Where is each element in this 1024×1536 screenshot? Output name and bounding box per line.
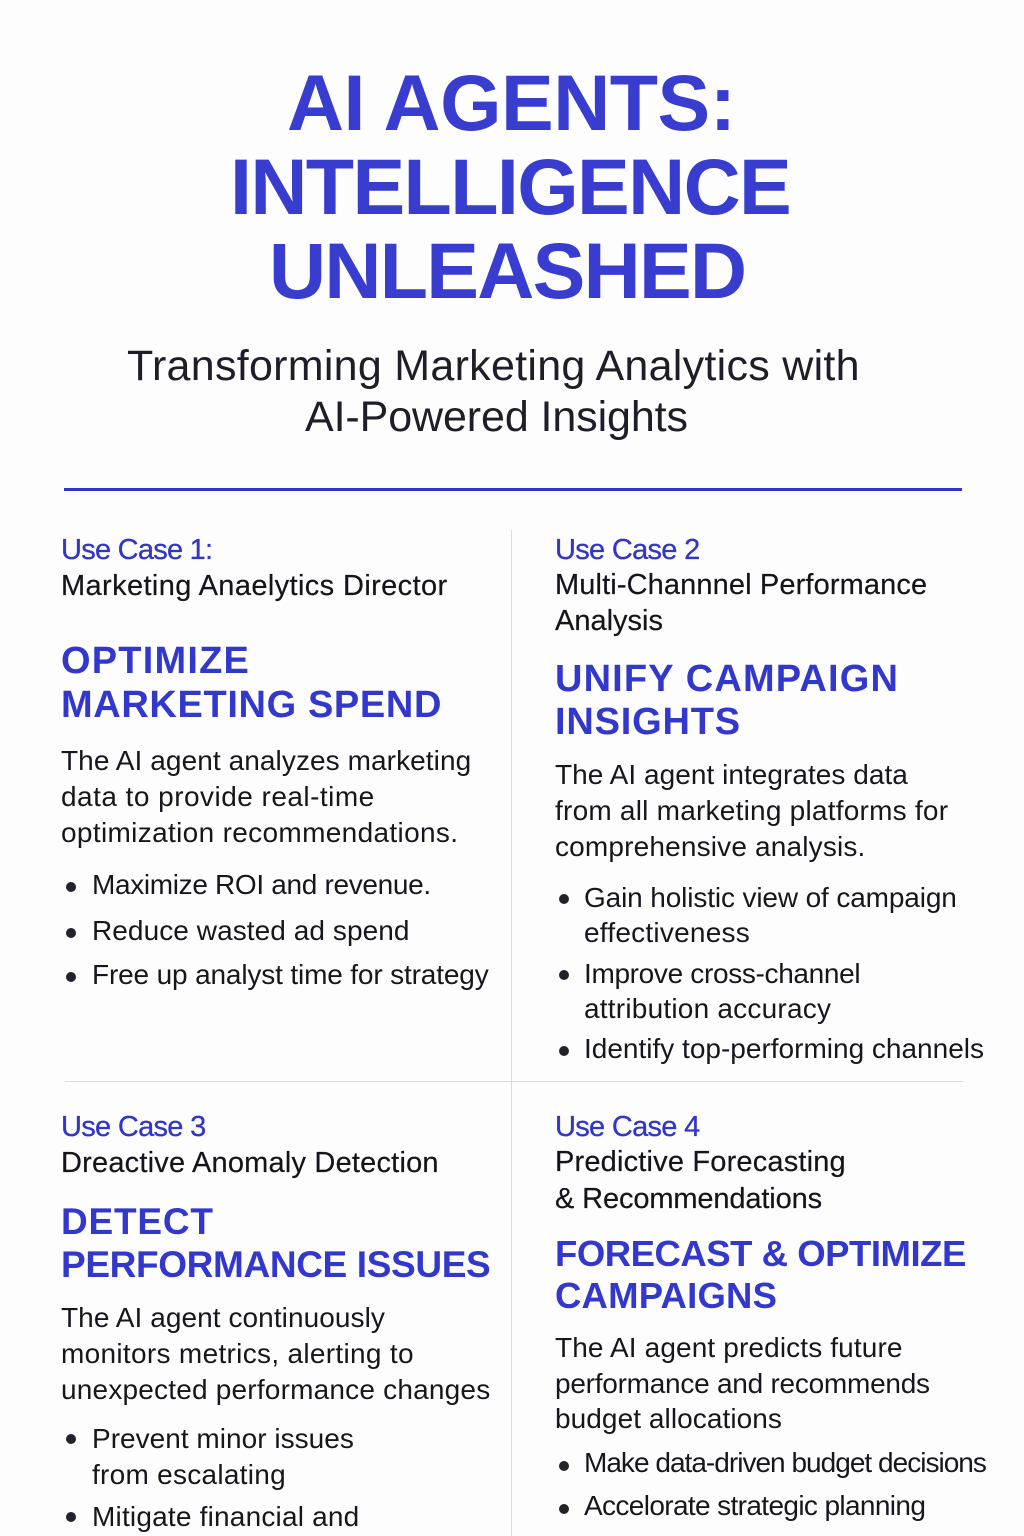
use case 2 heading: INSIGHTS (555, 701, 741, 743)
use case 4 role (555, 1146, 846, 1215)
use case 3 description: The AI agent continuously (61, 1302, 385, 1333)
use case 1 label: Use Case 1: (61, 534, 212, 566)
use case 2 heading (555, 658, 899, 743)
use case 4 heading: FORECAST & OPTIMIZE (555, 1233, 966, 1274)
use case 2 heading: UNIFY CAMPAIGN (555, 658, 899, 700)
use case 4 benefits: Accelorate strategic planning (584, 1490, 925, 1521)
panel divider lines (65, 530, 963, 1536)
use case 2 benefits (559, 882, 984, 1064)
use case 1 benefits: Free up analyst time for strategy (92, 959, 489, 990)
use case 1 heading (61, 640, 442, 726)
use case 2 description: comprehensive analysis. (555, 831, 866, 862)
use case 1 description: data to provide real-time (61, 781, 375, 812)
use case 4 role: & Recommendations (555, 1183, 822, 1215)
use case 3 benefits: Mitigate financial and (92, 1501, 359, 1532)
use case 3 benefits: Prevent minor issues (92, 1423, 354, 1454)
use case 2 label: Use Case 2 (555, 534, 700, 566)
subtitle: AI-Powered Insights (305, 393, 688, 441)
use case 1 description: optimization recommendations. (61, 817, 458, 848)
use case 2 benefits: Gain holistic view of campaign (584, 882, 957, 913)
title: AI AGENTS: (287, 58, 736, 147)
use case 3 description (61, 1302, 490, 1405)
use case 4 description: The AI agent predicts future (555, 1332, 903, 1363)
use case 1 heading: OPTIMIZE (61, 640, 250, 682)
use case 3 description: unexpected performance changes (61, 1374, 490, 1405)
use case 4 role: Predictive Forecasting (555, 1146, 846, 1178)
use case 1 benefits: Maximize ROI and revenue. (92, 869, 431, 900)
header divider (64, 488, 962, 491)
use case 2 benefits: effectiveness (584, 917, 750, 948)
use case 1 description: The AI agent analyzes marketing (61, 745, 471, 776)
use case 2 description (555, 759, 948, 862)
use case 2 role: Multi-Channnel Performance (555, 569, 927, 601)
use case 4 description (555, 1332, 930, 1434)
use case 1 benefits: Reduce wasted ad spend (92, 915, 410, 946)
use case 4 description: budget allocations (555, 1403, 782, 1434)
use case 1 heading: MARKETING SPEND (61, 684, 442, 726)
use case 2 role: Analysis (555, 605, 663, 637)
use case 1 description (61, 745, 471, 848)
subtitle: Transforming Marketing Analytics with (127, 342, 860, 390)
use case 4 heading (555, 1233, 966, 1316)
use case 3 description: monitors metrics, alerting to (61, 1338, 414, 1369)
panel: use case 3 (61, 1111, 490, 1532)
title: INTELLIGENCE (230, 142, 790, 231)
panel: use case 4 (555, 1111, 986, 1521)
subtitle (127, 342, 860, 441)
use case 4 label: Use Case 4 (555, 1111, 700, 1143)
use case 3 heading (61, 1201, 490, 1285)
use case 4 benefits (559, 1447, 986, 1521)
use case 3 heading: DETECT (61, 1201, 214, 1242)
use case 2 benefits: attribution accuracy (584, 993, 831, 1024)
use case 3 label: Use Case 3 (61, 1111, 206, 1143)
use case 2 description: from all marketing platforms for (555, 795, 948, 826)
panel: use case 2 (554, 534, 984, 1064)
use case 2 benefits: Improve cross-channel (584, 958, 860, 989)
use case 2 role (554, 569, 927, 637)
use case 2 description: The AI agent integrates data (555, 759, 908, 790)
use case 4 benefits: Make data-driven budget decisions (584, 1447, 986, 1478)
title: UNLEASHED (269, 226, 745, 315)
use case 3 benefits: from escalating (92, 1459, 286, 1490)
use case 3 heading: PERFORMANCE ISSUES (61, 1244, 490, 1285)
panel: use case 1 (61, 534, 489, 990)
use case 3 benefits (66, 1423, 359, 1532)
use case 1 benefits (66, 869, 489, 990)
use case 4 heading: CAMPAIGNS (555, 1275, 777, 1316)
use case 3 role: Dreactive Anomaly Detection (61, 1147, 439, 1179)
use case 1 role: Marketing Anaelytics Director (61, 570, 448, 602)
use case 2 benefits: Identify top-performing channels (584, 1033, 984, 1064)
title (230, 58, 790, 315)
use case 4 description: performance and recommends (555, 1368, 930, 1398)
